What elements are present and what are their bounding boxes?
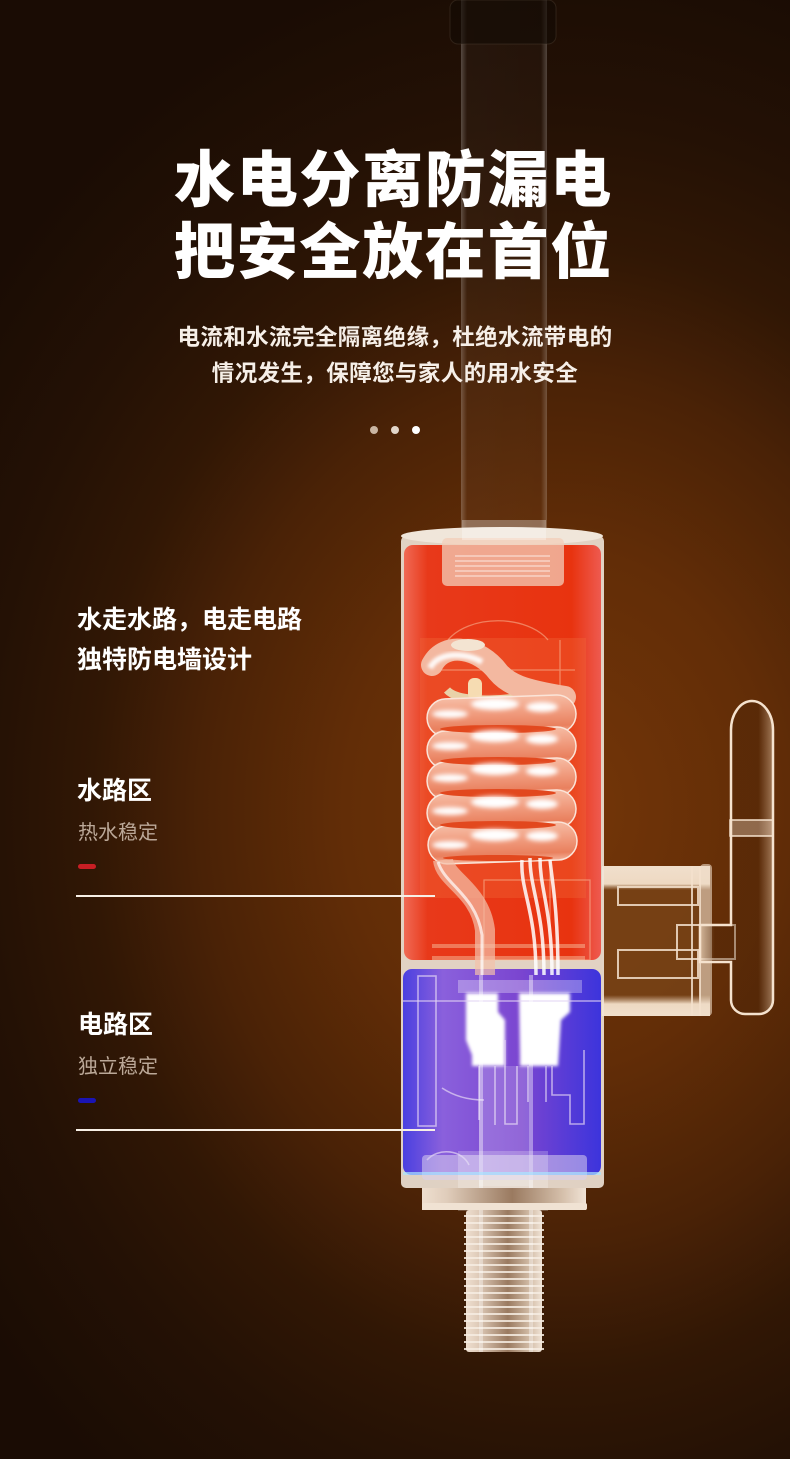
top water pipe bbox=[450, 0, 556, 535]
lower cap bbox=[403, 1151, 601, 1211]
design note bbox=[77, 606, 302, 674]
title bbox=[174, 146, 613, 286]
electric zone caption: 独立稳定 bbox=[78, 1056, 158, 1078]
electric zone leader line bbox=[76, 1129, 435, 1131]
electric module bbox=[403, 975, 601, 1190]
design note: 水走水路，电走电路 bbox=[77, 606, 302, 634]
title: 把安全放在首位 bbox=[174, 218, 613, 286]
electric zone blue marker bbox=[78, 1098, 96, 1103]
water zone red marker bbox=[78, 864, 96, 869]
subtitle: 情况发生，保障您与家人的用水安全 bbox=[212, 361, 578, 386]
subtitle: 电流和水流完全隔离绝缘，杜绝水流带电的 bbox=[177, 325, 613, 350]
indicator dots bbox=[370, 426, 420, 434]
subtitle bbox=[177, 325, 613, 386]
heating coil bbox=[426, 639, 578, 985]
water zone caption: 热水稳定 bbox=[78, 822, 158, 844]
water chamber (red) bbox=[404, 545, 601, 960]
threaded bottom stud bbox=[464, 1210, 544, 1352]
internal wire frame bbox=[420, 621, 590, 960]
title: 水电分离防漏电 bbox=[174, 146, 613, 214]
coil rings bbox=[426, 694, 578, 865]
coil legs bbox=[443, 860, 485, 975]
electric chamber (blue) bbox=[403, 969, 601, 1175]
water zone label: 水路区 bbox=[77, 777, 152, 805]
gaps between rings bbox=[440, 725, 556, 861]
side handle valve bbox=[602, 701, 773, 1016]
threaded inlet collar bbox=[442, 520, 564, 586]
coil highlights bbox=[432, 698, 558, 849]
electric zone label: 电路区 bbox=[78, 1011, 153, 1039]
main cylinder body bbox=[401, 527, 604, 1188]
design note: 独特防电墙设计 bbox=[77, 646, 252, 674]
water zone leader line bbox=[76, 895, 435, 897]
